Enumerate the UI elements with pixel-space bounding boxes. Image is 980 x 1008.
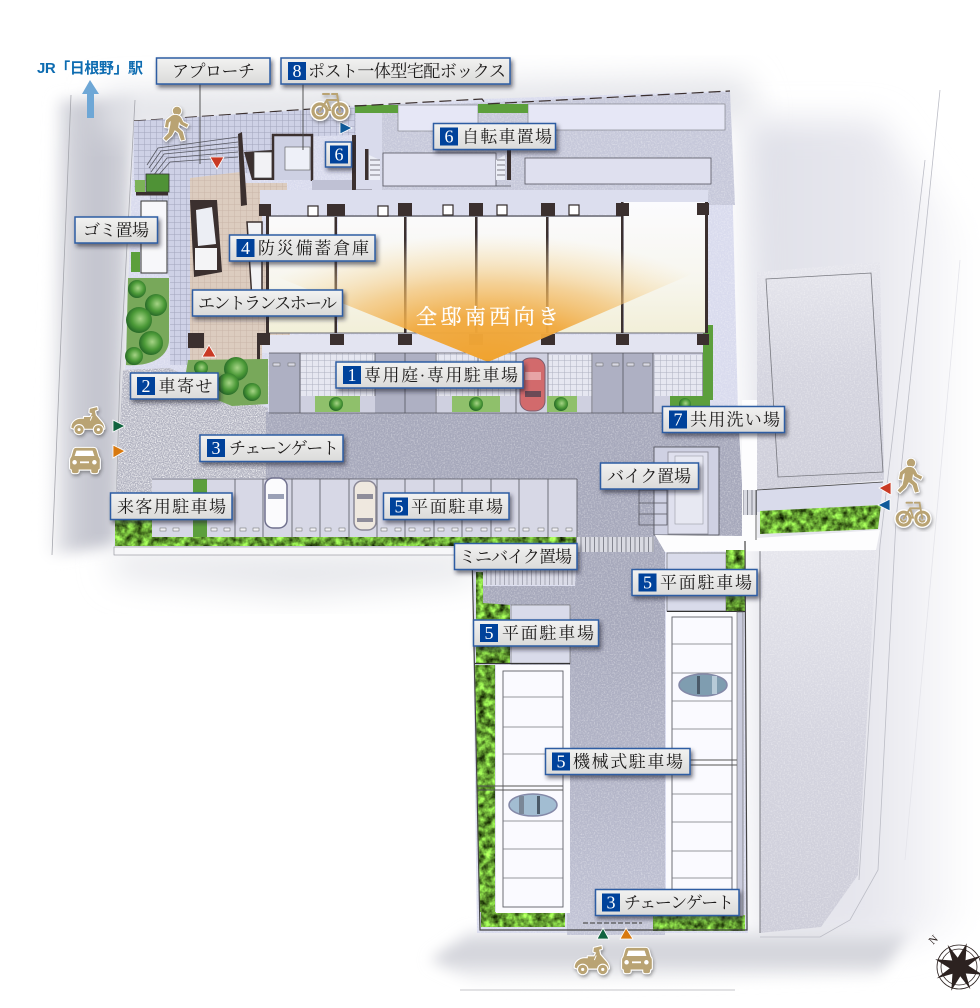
bike parking and wash area: [639, 447, 719, 535]
label: 2 車寄せ: 2: [142, 376, 150, 396]
label: 6 自転車置場: [434, 124, 556, 150]
icon: pedestrian east: [898, 459, 922, 493]
label: 6 bicycle box: 6: [334, 144, 344, 164]
label: 5 機械式駐車場: [546, 748, 690, 774]
entrance tan floor: [190, 172, 290, 368]
label: 8 ポスト一体型宅配ボックス: ポスト一体型宅配ボックス: [308, 62, 506, 81]
label: 4 防災備蓄倉庫: 4: [241, 238, 250, 258]
label: 3 チェーンゲート lower: 3: [606, 892, 616, 912]
label: 5 平面駐車場 flat row: 5: [394, 496, 404, 516]
label: 7 共用洗い場: 7: [674, 410, 682, 430]
chain gate bottom: [583, 922, 642, 924]
corridor and building: [257, 190, 709, 345]
label: 3 チェーンゲート upper: チェーンゲート: [229, 439, 339, 458]
icon: bicycle east: [897, 503, 929, 525]
compass: [925, 933, 980, 1001]
label: 1 専用庭・専用駐車場: 1: [348, 365, 356, 385]
label: 1 専用庭・専用駐車場: 専用庭·専用駐車場: [364, 366, 518, 385]
label: エントランスホール: エントランスホール: [198, 294, 337, 313]
label: 5 平面駐車場 left: [474, 620, 598, 646]
upper parking area: [352, 92, 735, 205]
label: 5 機械式駐車場: 5: [556, 752, 566, 772]
red car: [520, 358, 545, 411]
label: 6 自転車置場: 自転車置場: [462, 128, 552, 146]
label: エントランスホール: [192, 290, 342, 316]
lower drive lighter wash: [567, 640, 665, 935]
south-west sunlight wedge: [240, 222, 720, 362]
east pedestrian passage: [655, 400, 883, 552]
label: 5 平面駐車場 left: 平面駐車場: [502, 624, 594, 643]
icon: car west: [70, 448, 100, 473]
station caption: JR「日根野」駅: [37, 60, 143, 77]
label: 5 平面駐車場 left: 5: [484, 623, 494, 643]
label: 8 ポスト一体型宅配ボックス: 8: [292, 61, 302, 81]
label: 4 防災備蓄倉庫: 防災備蓄倉庫: [258, 239, 369, 258]
white parked car: [265, 478, 287, 528]
wedge caption: 全邸南西向き: [416, 305, 559, 329]
visitor and flat parking row: [114, 479, 580, 555]
gravel forecourt: [115, 368, 268, 518]
left garden with trees: [125, 278, 169, 365]
label: 7 共用洗い場: 共用洗い場: [690, 410, 780, 430]
label: 6 bicycle box: [326, 142, 352, 167]
blue parked car upper: [679, 674, 727, 696]
label: 7 共用洗い場: [662, 406, 784, 432]
label: 来客用駐車場: 来客用駐車場: [117, 498, 226, 516]
lower small parking: [474, 550, 745, 664]
label: ゴミ置場: ゴミ置場: [83, 221, 149, 240]
leader lines: [200, 84, 303, 164]
label: 2 車寄せ: [130, 373, 218, 399]
garbage room: [131, 174, 169, 273]
label: 5 平面駐車場 flat row: 平面駐車場: [411, 498, 503, 516]
label: 5 平面駐車場 flat row: [384, 493, 509, 520]
icon: pedestrian north: [164, 107, 188, 141]
mini bike hatch: [483, 537, 654, 585]
label: ミニバイク置場: [454, 544, 577, 570]
label: バイク置場: [600, 463, 698, 489]
top boundary line: [134, 91, 730, 121]
neighbouring blocks: [757, 262, 884, 933]
label: 5 平面駐車場 right: 5: [643, 572, 652, 592]
label: 来客用駐車場: [110, 493, 232, 520]
label: 3 チェーンゲート upper: 3: [212, 438, 220, 458]
icon: bicycle north: [313, 94, 347, 118]
label: 2 車寄せ: 車寄せ: [158, 377, 212, 396]
approach steps: [147, 137, 238, 178]
icon: car south: [622, 948, 652, 973]
label: 5 機械式駐車場: 機械式駐車場: [573, 752, 683, 772]
label: アプローチ: アプローチ: [172, 62, 255, 81]
green edge strips: [472, 541, 747, 931]
label: 4 防災備蓄倉庫: [230, 235, 375, 261]
approach tiled path: [134, 107, 355, 365]
beige parked car: [354, 481, 376, 530]
label: 5 平面駐車場 right: [632, 570, 757, 596]
label: 6 自転車置場: 6: [444, 126, 454, 146]
label: 1 専用庭・専用駐車場: [336, 362, 523, 388]
label: 8 ポスト一体型宅配ボックス: [281, 58, 510, 84]
asphalt drive: [266, 412, 745, 935]
entrance structures: [188, 132, 352, 369]
label: 3 チェーンゲート upper: [200, 435, 343, 462]
label: 5 平面駐車場 right: 平面駐車場: [660, 574, 752, 592]
drop-off garden: [186, 357, 268, 406]
mechanical parking left: [478, 665, 570, 913]
blue parked car lower: [509, 794, 557, 816]
label: 3 チェーンゲート lower: [596, 890, 739, 916]
access triangles: [113, 122, 891, 939]
mechanical parking right: [666, 612, 743, 916]
label: 3 チェーンゲート lower: チェーンゲート: [624, 894, 734, 912]
label: バイク置場: バイク置場: [607, 467, 691, 486]
private garden parking row: [262, 325, 713, 413]
site base: [114, 91, 748, 933]
label: ゴミ置場: [75, 217, 158, 243]
label: アプローチ: [156, 58, 270, 84]
icon: scooter south: [575, 946, 609, 974]
direction arrow to JR station: [82, 80, 99, 118]
label: ミニバイク置場: ミニバイク置場: [459, 548, 572, 566]
compass: N: [927, 933, 941, 947]
icon: scooter west: [71, 407, 104, 434]
